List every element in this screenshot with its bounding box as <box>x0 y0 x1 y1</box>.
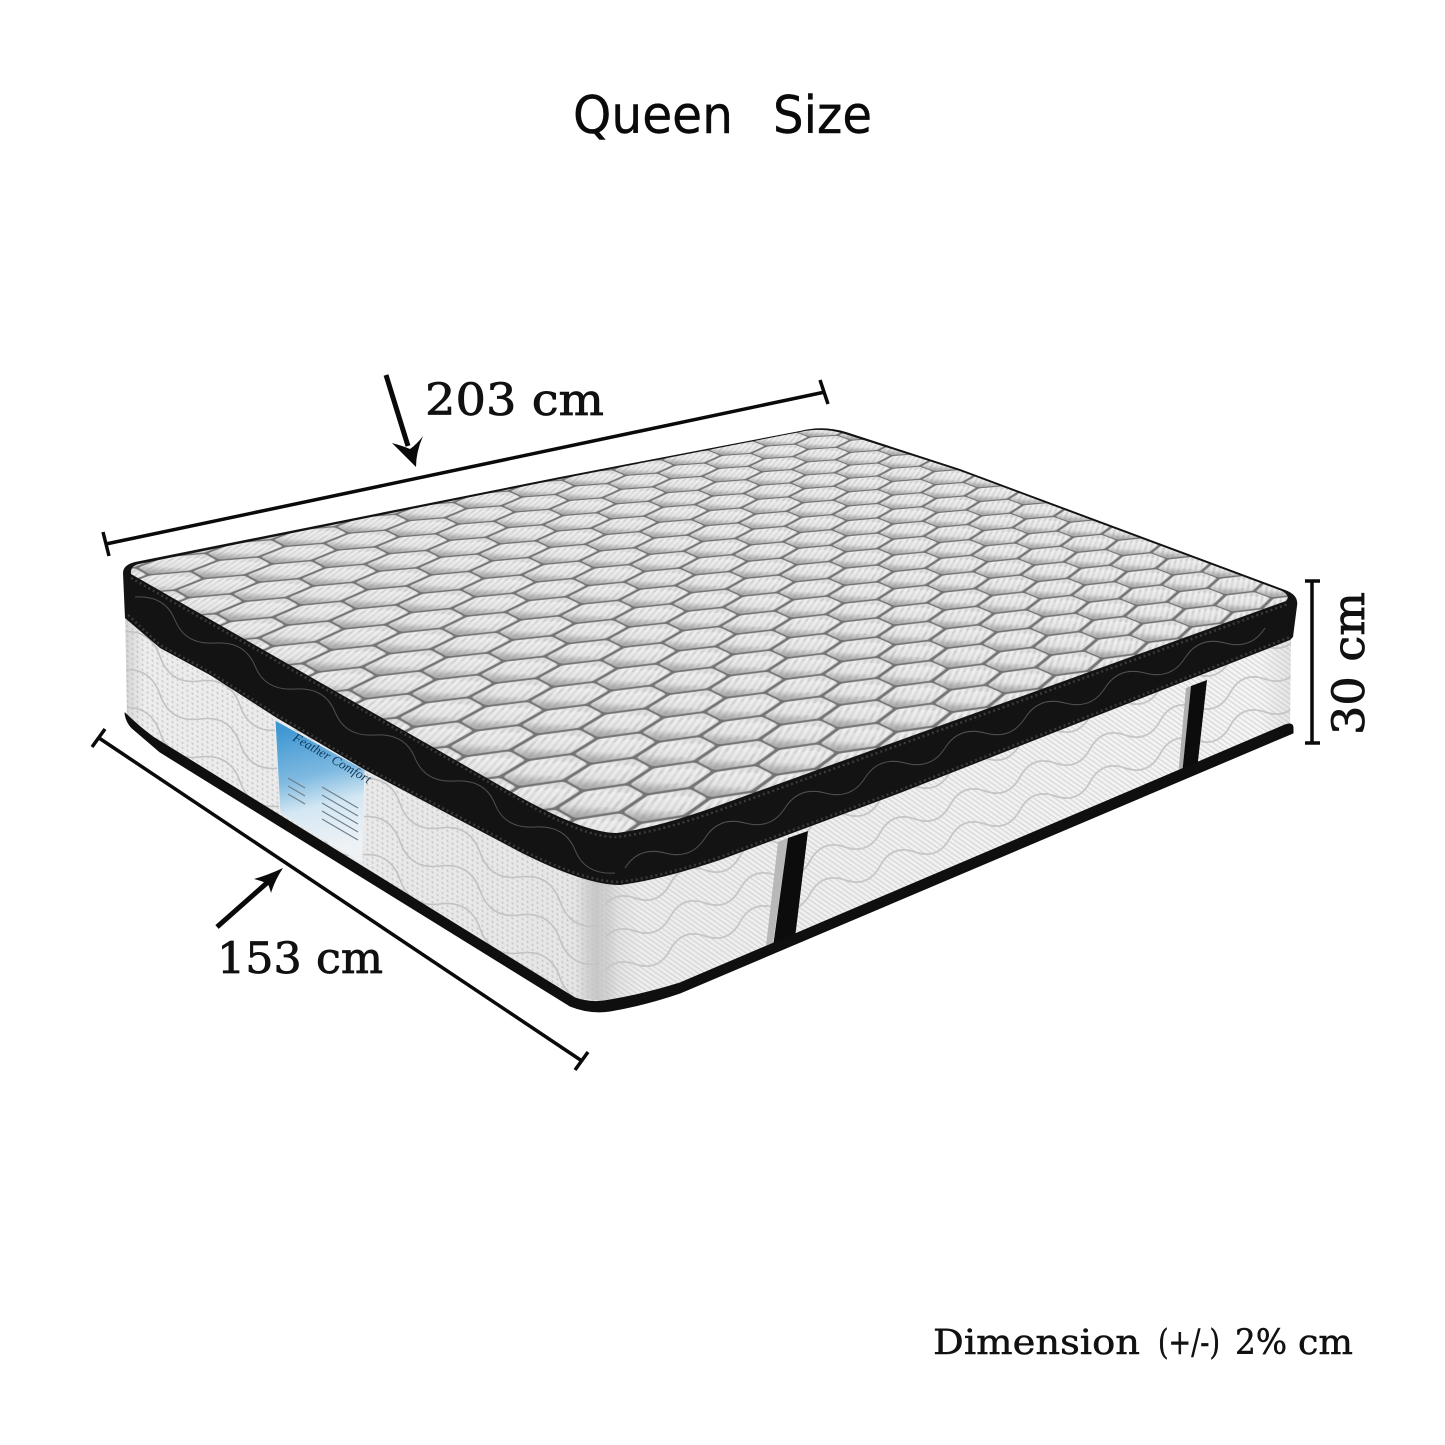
strap: rear handle <box>1178 680 1207 777</box>
label: 203 cm: 203 cm <box>425 375 604 426</box>
arrow: length <box>386 375 423 467</box>
bottom border band <box>125 713 1293 1012</box>
dimension tolerance note: (+/-) <box>1158 1323 1220 1363</box>
arrow: width <box>217 868 283 927</box>
dimension tolerance note: Dimension <box>933 1323 1140 1363</box>
dimension: length line <box>103 380 828 556</box>
top border band <box>123 428 1297 885</box>
mattress body: sides, straps, label and border band <box>123 428 1298 1012</box>
label brand text: Feather Comfort <box>290 729 374 787</box>
product label <box>275 720 374 863</box>
dimension tolerance note <box>933 1323 1353 1363</box>
quilted top surface <box>130 430 1288 833</box>
left side panel <box>120 610 605 1004</box>
title: Size <box>773 86 872 146</box>
title <box>573 86 872 146</box>
strap: front handle <box>766 831 808 947</box>
dimension tolerance note: cm <box>1298 1323 1353 1363</box>
title: Queen <box>573 86 733 146</box>
right side panel <box>600 632 1300 1004</box>
dimension: height line <box>1305 581 1320 743</box>
dimension: width line <box>92 729 588 1070</box>
corner shading <box>575 875 618 1002</box>
label: 30 cm: 30 cm <box>1324 592 1375 735</box>
label: 153 cm: 153 cm <box>217 934 383 984</box>
dimension tolerance note: 2% <box>1235 1323 1287 1363</box>
